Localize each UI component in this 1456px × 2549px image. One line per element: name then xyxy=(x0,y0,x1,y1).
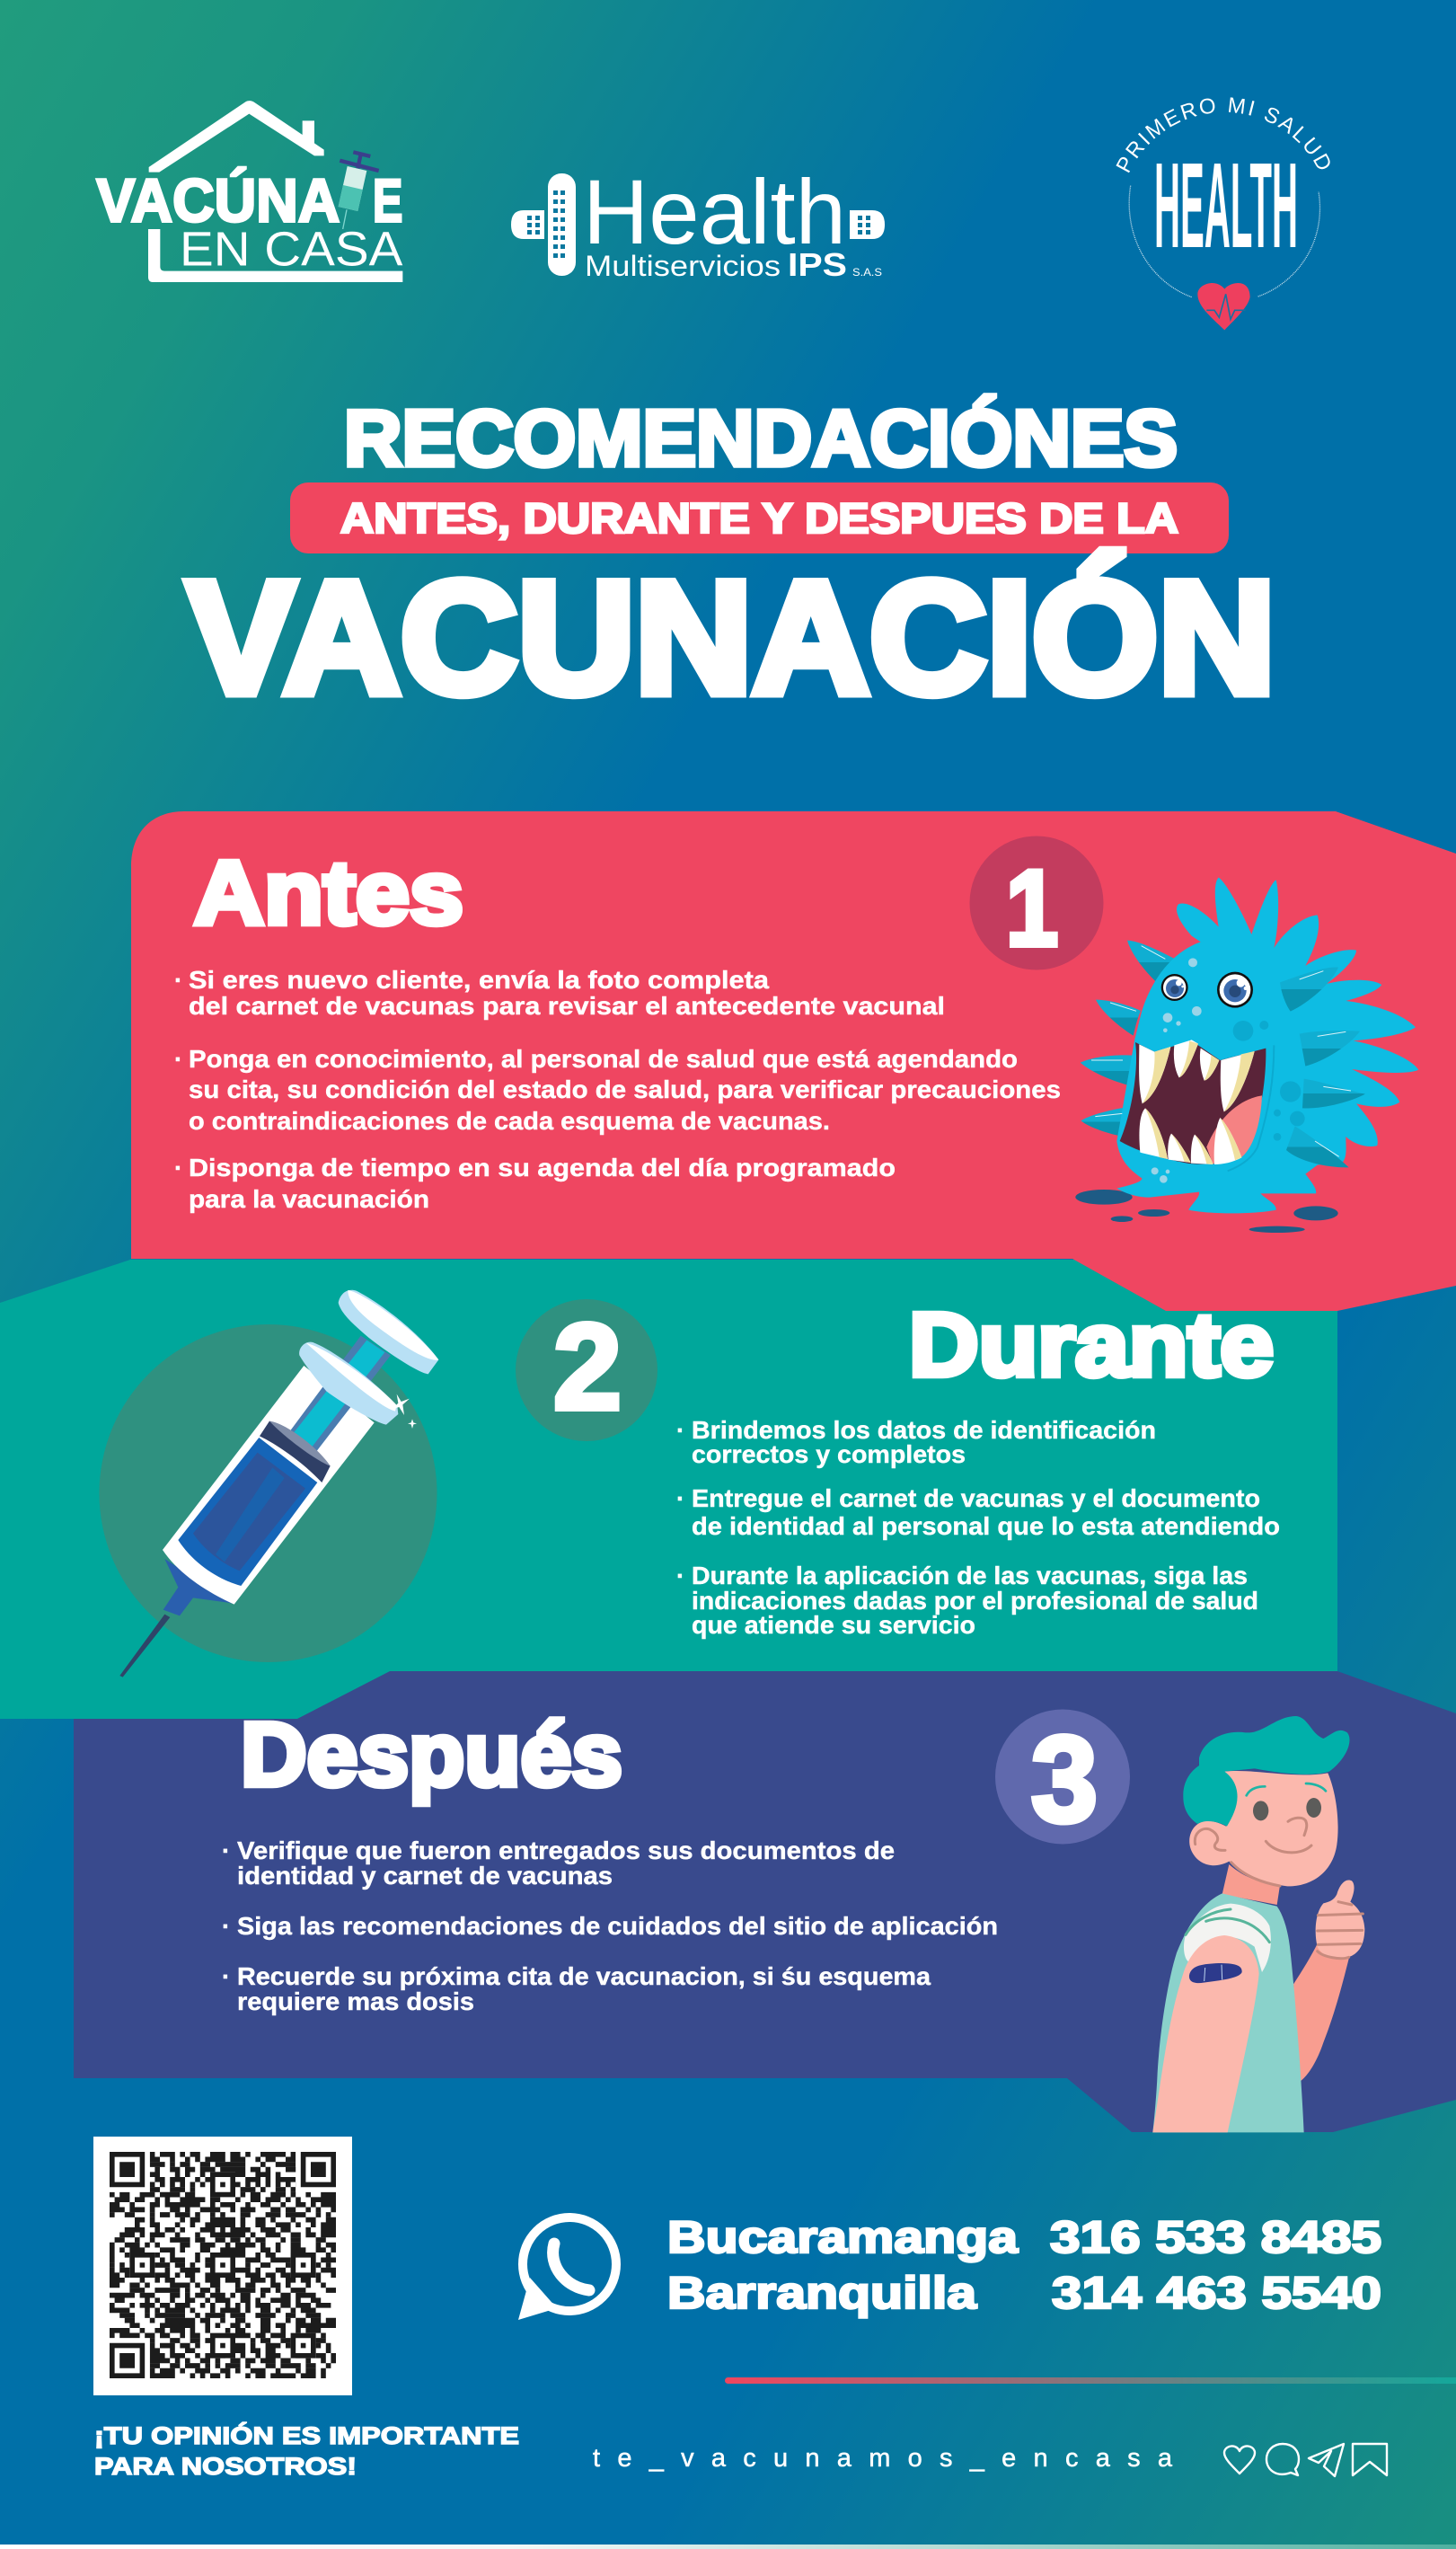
icon: WhatsApp xyxy=(518,2217,616,2320)
social icons xyxy=(1224,2444,1387,2476)
feedback message: PARA NOSOTROS! xyxy=(94,2453,357,2480)
needle hub xyxy=(163,1559,234,1615)
icon: small syringe xyxy=(339,152,379,229)
dotted ring xyxy=(1129,186,1319,297)
bullet: nuevo cliente: del carnet de vacunas para revisar el antecedente vacunal xyxy=(189,992,945,1020)
bullet: nuevo cliente xyxy=(174,966,945,1020)
bullet: documentos: Verifique que fueron entregados sus documentos de xyxy=(237,1837,895,1864)
title: Vacunación: VACUNACIÓN xyxy=(187,548,1275,727)
teeth white xyxy=(1139,1040,1255,1164)
bullet: aplicación: Durante la aplicación de las vacunas, siga las xyxy=(692,1562,1248,1589)
bullet: aplicación: que atiende su servicio xyxy=(692,1611,975,1639)
right eye xyxy=(1217,972,1253,1008)
head xyxy=(1189,1771,1338,1886)
heading: Antes: Antes xyxy=(194,843,463,943)
number badge 2 xyxy=(516,1298,657,1441)
house roof xyxy=(149,101,324,173)
bullet: próxima cita: · xyxy=(222,1962,230,1990)
bullet: condición de salud: o contraindicaciones de cada esquema de vacunas. xyxy=(189,1107,830,1135)
icon: heart xyxy=(1197,283,1250,330)
bullet: nuevo cliente: Si eres nuevo cliente, envía la foto completa xyxy=(189,966,769,994)
number badge 1: 1 xyxy=(1006,848,1058,969)
plunger rod xyxy=(287,1336,391,1454)
curved slogan: PRIMERO MI SALUD xyxy=(1116,97,1330,173)
bullet: aplicación: · xyxy=(676,1562,684,1589)
bullet: tiempo en agenda xyxy=(174,1154,896,1213)
bullet: cuidados: Siga las recomendaciones de cuidados del sitio de aplicación xyxy=(237,1912,998,1940)
bullet: tiempo en agenda: · xyxy=(174,1154,182,1182)
hair xyxy=(1183,1716,1349,1827)
bullet: próxima cita: Recuerde su próxima cita de vacunacion, si śu esquema xyxy=(237,1962,931,1990)
phone: Barranquilla: Barranquilla xyxy=(667,2268,977,2318)
big circle behind syringe xyxy=(99,1324,437,1662)
panel: antes background xyxy=(131,811,1456,1311)
teeth shading xyxy=(1143,1040,1255,1164)
bullet: aplicación xyxy=(676,1562,1258,1639)
heading: Durante: Durante xyxy=(909,1295,1274,1395)
forearm xyxy=(1293,1943,1349,2082)
QR modules xyxy=(110,2155,336,2376)
gradient divider xyxy=(725,2377,1456,2384)
mouth xyxy=(1120,1040,1266,1164)
upper arm xyxy=(1152,1935,1259,2132)
icon: send arrow xyxy=(1309,2444,1344,2476)
neck xyxy=(1222,1864,1280,1905)
stopper xyxy=(260,1421,331,1482)
sparkles xyxy=(393,1394,417,1429)
illustration: vaccinated boy xyxy=(1152,1716,1364,2132)
bullet: carnet y documento: Entregue el carnet de vacunas y el documento xyxy=(692,1484,1260,1512)
bullet: datos de identificación xyxy=(676,1416,1156,1468)
left eye xyxy=(1161,974,1188,1001)
number badge 2: 2 xyxy=(553,1298,622,1435)
QR white card xyxy=(93,2137,352,2395)
wordmark VACÚNA: VACÚNA xyxy=(96,167,340,235)
rolled sleeve xyxy=(1184,1904,1271,1972)
wordmark Health: Health xyxy=(583,161,846,263)
barrel flange xyxy=(299,1342,398,1425)
number badge 3: 3 xyxy=(1031,1711,1098,1847)
QR finder and alignment patterns xyxy=(110,2152,336,2378)
phone: Bucaramanga: 316 533 8485 xyxy=(1050,2212,1381,2262)
wordmark IPS: IPS xyxy=(788,246,847,283)
bullet: datos de identificación: · xyxy=(676,1416,684,1444)
illustration: blue virus monster xyxy=(1075,878,1418,1233)
panel: durante background xyxy=(0,1260,1337,1719)
bottom edge strip xyxy=(0,2545,1456,2549)
band-aid xyxy=(1189,1963,1242,1983)
left spikes xyxy=(1081,941,1175,1137)
face details xyxy=(1195,1783,1326,1886)
bullet: datos de identificación: correctos y completos xyxy=(692,1440,966,1468)
barrel xyxy=(163,1366,375,1605)
panel: después content xyxy=(222,1704,1364,2132)
logo: Vacúnate en casa xyxy=(96,101,402,282)
phone: Bucaramanga: Bucaramanga xyxy=(667,2212,1019,2262)
monster body xyxy=(1116,878,1418,1213)
vaccine liquid xyxy=(178,1438,317,1586)
bullet: cuidados: · xyxy=(222,1912,230,1940)
icon: heart outline xyxy=(1224,2446,1255,2474)
spike highlights xyxy=(1091,946,1351,1156)
feedback message: ¡TU OPINIÓN ES IMPORTANTE xyxy=(94,2421,519,2449)
logo: Primero mi salud Health xyxy=(1116,97,1330,331)
bullet: tiempo en agenda: para la vacunación xyxy=(189,1185,429,1213)
phone: Bucaramanga xyxy=(667,2212,1381,2262)
thumbs-up hand xyxy=(1316,1880,1364,1959)
bullet: tiempo en agenda: Disponga de tiempo en su agenda del día programado xyxy=(189,1154,896,1182)
logo: Health Multiservicios IPS xyxy=(511,161,885,283)
bullet: condición de salud xyxy=(174,1045,1061,1135)
bullet: nuevo cliente: · xyxy=(174,966,182,994)
subtitle pill xyxy=(290,482,1229,553)
tongue xyxy=(1206,1095,1262,1164)
mouth side crease xyxy=(1228,1045,1274,1171)
bullet: carnet y documento: de identidad al personal que lo esta atendiendo xyxy=(692,1512,1280,1540)
wordmark EN CASA: EN CASA xyxy=(180,223,402,277)
right spikes xyxy=(1280,968,1365,1167)
number badge 1 xyxy=(970,836,1103,970)
bullet: datos de identificación: Brindemos los datos de identificación xyxy=(692,1416,1156,1444)
QR code xyxy=(93,2137,352,2395)
panel: durante content xyxy=(99,1290,1280,1677)
shirt xyxy=(1152,1893,1304,2132)
house floor bracket xyxy=(148,229,402,282)
subtitle text: ANTES, DURANTE Y DESPUES DE LA xyxy=(340,494,1178,542)
bullet: próxima cita: requiere mas dosis xyxy=(237,1987,474,2015)
panel: después background xyxy=(74,1671,1456,2132)
panel: antes content xyxy=(174,836,1418,1233)
bullet: documentos xyxy=(222,1837,895,1890)
icon: comment bubble xyxy=(1266,2444,1299,2475)
bullet: carnet y documento xyxy=(676,1484,1280,1540)
puddles xyxy=(1075,1190,1338,1233)
feedback message xyxy=(94,2421,519,2480)
freckles xyxy=(1152,958,1202,1183)
wordmark S.A.S: S.A.S xyxy=(852,266,882,279)
bullet: carnet y documento: · xyxy=(676,1484,684,1512)
bullet: próxima cita xyxy=(222,1962,931,2015)
social handle: te_vacunamos_encasa xyxy=(593,2444,1173,2473)
plunger disc xyxy=(339,1290,438,1374)
wordmark Multiservicios: Multiservicios xyxy=(585,250,781,282)
phone: Barranquilla: 314 463 5540 xyxy=(1052,2268,1381,2318)
skin spots xyxy=(1233,1021,1305,1141)
illustration: syringe xyxy=(119,1290,438,1677)
title: Recomendaciones: RECOMENDACIÓNES xyxy=(344,394,1178,482)
bullet: documentos: identidad y carnet de vacunas xyxy=(237,1862,613,1890)
phone: Barranquilla xyxy=(667,2268,1381,2318)
icon: bandage xyxy=(511,173,885,276)
bullet: condición de salud: Ponga en conocimiento, al personal de salud que está agendando xyxy=(189,1045,1018,1073)
needle xyxy=(119,1615,170,1677)
wordmark E: E xyxy=(373,168,402,235)
bullet: condición de salud: su cita, su condición del estado de salud, para verificar precauciones xyxy=(189,1075,1061,1103)
icon: heartbeat line xyxy=(1206,294,1246,319)
heading: Después: Después xyxy=(241,1704,622,1805)
number badge 3 xyxy=(995,1709,1130,1847)
bullet: aplicación: indicaciones dadas por el profesional de salud xyxy=(692,1587,1258,1615)
bullet: condición de salud: · xyxy=(174,1045,182,1073)
bullet: documentos: · xyxy=(222,1837,230,1864)
icon: bookmark xyxy=(1353,2444,1387,2475)
